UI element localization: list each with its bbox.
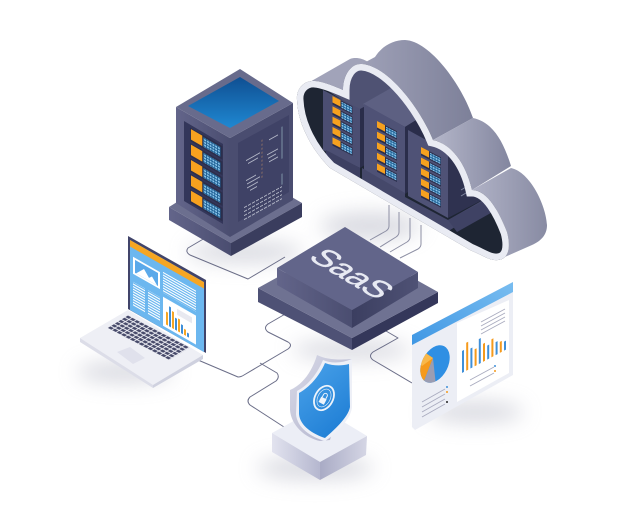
server base xyxy=(169,165,302,256)
servers inside cloud xyxy=(297,60,509,260)
wires: cloud to chip xyxy=(370,205,421,258)
keyboard xyxy=(107,315,190,360)
bar chart xyxy=(462,322,506,373)
screen frame xyxy=(128,236,206,353)
cloud front opening xyxy=(297,64,509,260)
wire: shield to chip xyxy=(248,363,284,427)
cloud extrusion lobes xyxy=(308,40,547,260)
server body xyxy=(176,69,293,237)
chip upper block xyxy=(277,227,418,328)
rack panel xyxy=(184,121,223,224)
SaaS label: SaaS xyxy=(300,244,402,304)
legend dots xyxy=(446,365,496,403)
cloud with servers xyxy=(297,40,547,260)
back top surface xyxy=(326,65,415,109)
document sheet xyxy=(412,282,513,430)
server blue top xyxy=(188,77,279,128)
orange banner xyxy=(130,240,204,289)
dashboard document xyxy=(412,282,513,430)
touchpad xyxy=(117,347,145,364)
wire: document to chip xyxy=(370,331,412,383)
wire: laptop to chip xyxy=(198,313,290,377)
main server tower xyxy=(169,69,302,256)
lock icon xyxy=(310,382,338,414)
cloud white rim xyxy=(297,64,509,260)
pie chart xyxy=(420,345,450,383)
laptop base xyxy=(80,310,203,388)
shield side xyxy=(290,355,352,441)
picture card xyxy=(133,257,160,289)
text columns xyxy=(133,282,145,313)
code panel on server xyxy=(238,115,289,222)
shield rim xyxy=(296,359,352,441)
cloud server A xyxy=(323,85,405,178)
screen content xyxy=(130,240,204,352)
rack rows xyxy=(190,128,222,221)
soft ground shadows xyxy=(77,212,523,480)
cloud server B xyxy=(362,80,442,205)
white chart panel xyxy=(457,300,509,402)
shield blue face xyxy=(299,363,350,438)
laptop xyxy=(80,236,206,388)
SaaS chip xyxy=(258,227,438,350)
chip lower plate xyxy=(258,240,438,350)
shield pedestal xyxy=(272,407,367,480)
cloud server C xyxy=(405,130,496,232)
connector wires xyxy=(187,205,421,427)
security shield xyxy=(272,355,367,480)
text lines xyxy=(422,309,505,417)
blue header xyxy=(412,282,513,345)
bar chart card xyxy=(163,297,196,345)
wire: server to chip xyxy=(187,238,285,279)
